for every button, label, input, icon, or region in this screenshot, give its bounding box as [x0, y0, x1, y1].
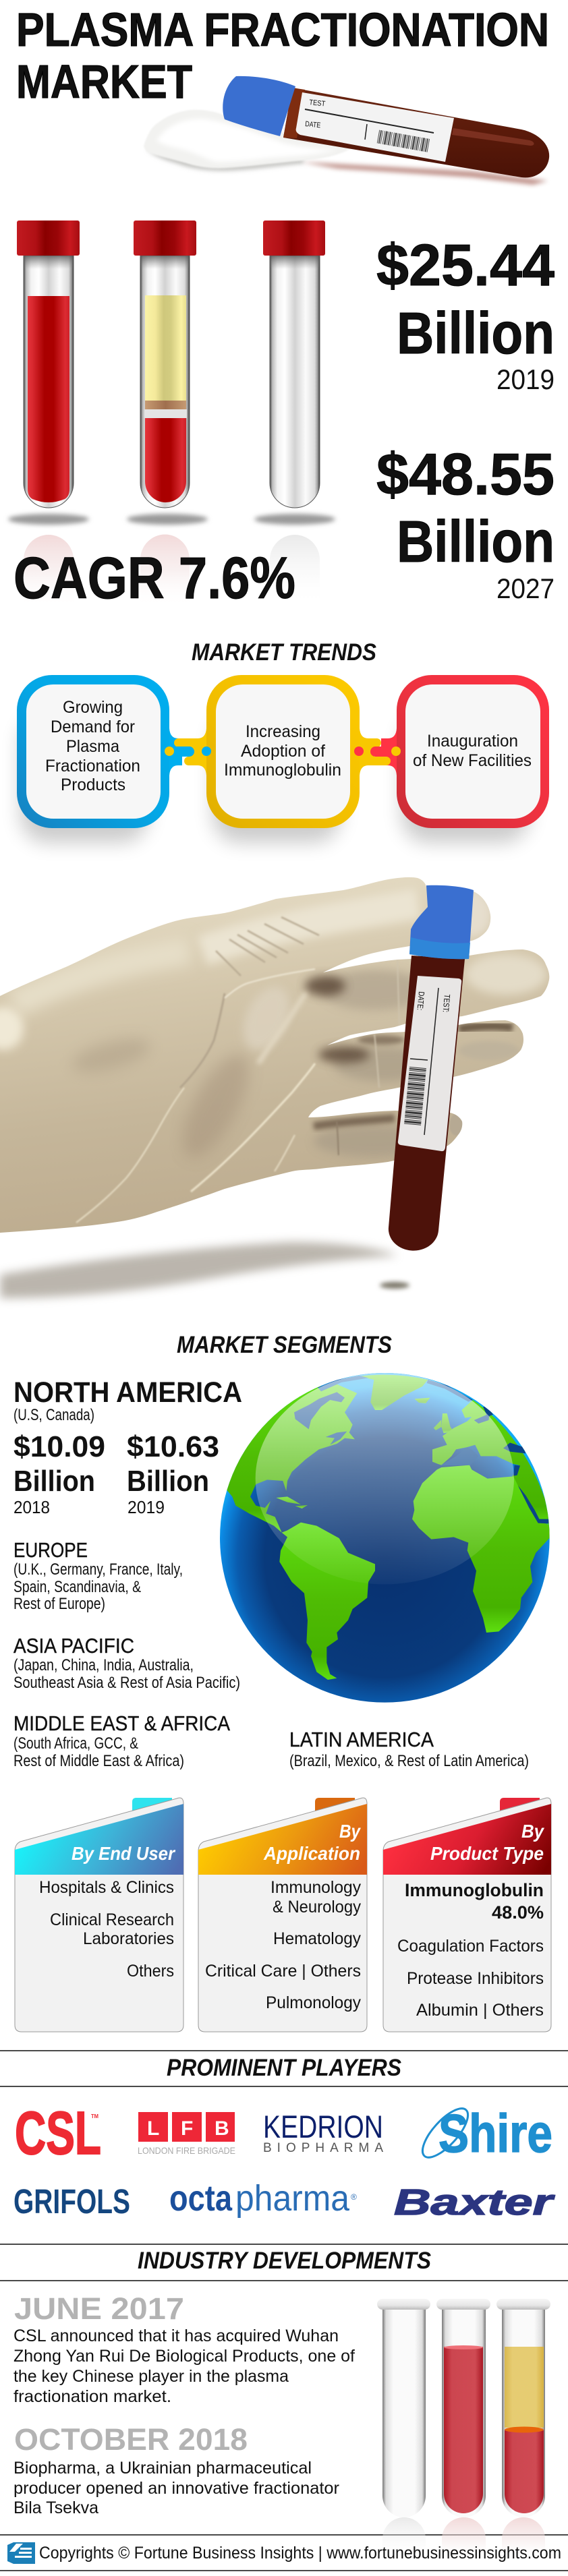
- card: increasing adoption: Immunoglobulin: [224, 761, 341, 780]
- card: increasing adoption: Adoption of: [241, 742, 325, 761]
- development text: CSL: Zhong Yan Rui De Biological Products, one of: [13, 2347, 355, 2366]
- tube shadows: [8, 514, 335, 525]
- region: europe: EUROPE: [13, 1538, 88, 1562]
- stat: 2027 market size: $48.55: [376, 442, 555, 507]
- development text: CSL: the key Chinese player in the plasma: [13, 2367, 289, 2386]
- tube body: [283, 88, 549, 177]
- image: three glass test tubes: [377, 2299, 550, 2560]
- region: middle east and africa: [13, 1711, 230, 1770]
- card: by product type: [383, 1798, 551, 2032]
- cotton ball: [144, 110, 351, 171]
- hand shadow: [0, 1242, 409, 1298]
- date: october 2018: OCTOBER 2018: [14, 2422, 248, 2457]
- logo: LFB: [138, 2112, 235, 2156]
- logo: Baxter: Baxter: [394, 2182, 555, 2223]
- logo: CSL: CSL: [15, 2100, 101, 2167]
- panel: industry developments text: [13, 2291, 355, 2517]
- stat: 2027 market size: [376, 442, 555, 604]
- development text: CSL: CSL announced that it has acquired Wuhan: [13, 2326, 339, 2345]
- title: [16, 3, 549, 108]
- card: by application: Application: [263, 1843, 360, 1864]
- glossy highlight: [256, 1373, 514, 1584]
- connector: yellow to red: [360, 728, 401, 775]
- logo: LFB: B: [215, 2117, 229, 2140]
- tube label: DATE: [305, 120, 321, 129]
- region: middle east and africa: MIDDLE EAST & AFRICA: [13, 1711, 230, 1735]
- region: north america: $10.09: [13, 1430, 105, 1463]
- card: by end user: Hospitals & Clinics: [39, 1878, 174, 1897]
- continents: [227, 1375, 550, 1680]
- region: asia pacific: ASIA PACIFIC: [13, 1634, 134, 1658]
- tube cap: [223, 76, 295, 136]
- index finger: [324, 967, 410, 1012]
- development text: Biopharma: Bila Tsekva: [13, 2498, 98, 2517]
- region: asia pacific: [13, 1634, 240, 1692]
- tube label: TEST: [309, 98, 326, 109]
- card: new facilities: [397, 675, 549, 828]
- held tube label: DATE:: [416, 991, 426, 1011]
- card: by application: By: [339, 1821, 361, 1842]
- middle finger: [334, 1045, 403, 1083]
- card: growing demand: Plasma: [66, 737, 119, 756]
- title: MARKET: [16, 55, 192, 108]
- region: north america: [13, 1376, 242, 1517]
- glove: [0, 870, 568, 1241]
- region: middle east and africa: (South Africa, GCC, &: [13, 1734, 138, 1753]
- logo: Octapharma: pharma: [235, 2178, 350, 2219]
- card: growing demand: [17, 675, 169, 828]
- tube label: [296, 92, 454, 162]
- region: north america: 2019: [127, 1497, 165, 1517]
- footer: [7, 2542, 561, 2564]
- region: north america: 2018: [13, 1497, 50, 1517]
- region: north america: Billion: [127, 1465, 209, 1498]
- card: by product type: Immunoglobulin: [405, 1880, 544, 1900]
- region: europe: Spain, Scandinavia, &: [13, 1578, 141, 1596]
- region: europe: [13, 1538, 183, 1613]
- tube reflections: [24, 535, 320, 607]
- card: by end user: Clinical Research: [50, 1910, 174, 1929]
- card: by end user: Laboratories: [83, 1929, 174, 1948]
- held tube label: TEST:: [441, 994, 452, 1013]
- connector dots: [165, 747, 401, 756]
- stat: 2019 market size: 2019: [496, 363, 555, 395]
- region: north america: Billion: [13, 1465, 95, 1498]
- logo: LFB: LONDON FIRE BRIGADE: [138, 2145, 235, 2156]
- card: increasing adoption: Increasing: [246, 722, 320, 741]
- region: north america: $10.63: [127, 1430, 219, 1463]
- card: by application: Critical Care | Others: [205, 1962, 361, 1981]
- card: by application: & Neurology: [273, 1898, 361, 1916]
- card: new facilities: of New Facilities: [413, 751, 532, 770]
- icon: globe: [220, 1373, 550, 1703]
- region: europe: (U.K., Germany, France, Italy,: [13, 1560, 183, 1579]
- logo: Kedrion Biopharma: [263, 2109, 383, 2155]
- card: by product type: Protease Inhibitors: [407, 1969, 544, 1988]
- glove creases: [76, 917, 399, 1223]
- card: by application: Hematology: [273, 1929, 361, 1948]
- card: by application: [198, 1798, 367, 2032]
- region: latin america: LATIN AMERICA: [289, 1728, 434, 1751]
- logo: Kedrion Biopharma: BIOPHARMA: [263, 2141, 383, 2155]
- reflections: [382, 2517, 545, 2560]
- tube 3: empty: [263, 221, 325, 508]
- held tube body: [389, 956, 465, 1251]
- tube 2: separated plasma: [134, 221, 196, 508]
- panel: segmentation cards: [15, 1798, 551, 2032]
- connector: blue to yellow: [165, 728, 206, 775]
- card: new facilities: Inauguration: [427, 732, 518, 751]
- held tube cap: [409, 885, 474, 959]
- card: by application: Immunology: [271, 1878, 361, 1897]
- development text: CSL: fractionation market.: [13, 2387, 171, 2406]
- region: asia pacific: Southeast Asia & Rest of Asia Pacific): [13, 1674, 240, 1692]
- heading: market trends: MARKET TRENDS: [192, 639, 376, 666]
- panel: market trends flow: [17, 675, 549, 843]
- tube 1: whole blood: [17, 221, 80, 508]
- logo: Grifols: GRIFOLS: [13, 2182, 130, 2221]
- development text: Biopharma: Biopharma, a Ukrainian pharmaceutical: [13, 2459, 312, 2478]
- development text: Biopharma: [13, 2459, 339, 2517]
- card shadows: [20, 715, 530, 843]
- region: europe: Rest of Europe): [13, 1595, 105, 1613]
- region: north america: (U.S, Canada): [13, 1406, 94, 1424]
- card: by end user: Others: [127, 1962, 174, 1981]
- card: by product type: Albumin | Others: [416, 2001, 544, 2020]
- logo: LFB: F: [181, 2117, 193, 2140]
- card: growing demand: Fractionation: [45, 757, 140, 775]
- logo: Octapharma: octa: [169, 2178, 233, 2219]
- date: june 2017: JUNE 2017: [14, 2291, 184, 2326]
- image: blood sample tube on cotton: [144, 76, 549, 185]
- panel: regional segments: [13, 1373, 550, 1770]
- region: latin america: [289, 1728, 529, 1770]
- heading: industry developments: INDUSTRY DEVELOPMENTS: [138, 2248, 431, 2274]
- stat: 2019 market size: [376, 233, 555, 395]
- card: by product type: Product Type: [430, 1843, 544, 1864]
- ring finger: [314, 1125, 397, 1159]
- logo: Octapharma: [169, 2178, 357, 2219]
- logo: Octapharma: ®: [351, 2192, 357, 2202]
- logo: CSL: TM: [91, 2113, 98, 2119]
- icon: fortune business insights logo: [7, 2542, 35, 2564]
- development text: CSL: [13, 2326, 355, 2406]
- card: growing demand: Growing: [63, 698, 123, 717]
- stat: CAGR: CAGR 7.6%: [13, 546, 295, 611]
- plasma tube: [496, 2299, 550, 2517]
- stat: 2019 market size: $25.44: [376, 233, 555, 298]
- heading: market segments: MARKET SEGMENTS: [177, 1332, 392, 1358]
- thumb and back of hand light: [202, 904, 418, 951]
- stat: 2027 market size: 2027: [496, 573, 555, 604]
- card: by product type: 48.0%: [492, 1902, 544, 1923]
- card: by end user: [15, 1798, 183, 2032]
- image: three test tubes with red caps: [8, 221, 335, 607]
- logo: LFB: L: [147, 2117, 159, 2140]
- card: increasing adoption: [206, 675, 360, 828]
- image: gloved hand holding blood tube: [0, 870, 568, 1298]
- card: by product type: By: [521, 1821, 544, 1842]
- panel: company logos: [13, 2100, 555, 2223]
- held tube label: [398, 976, 461, 1151]
- region: middle east and africa: Rest of Middle East & Africa): [13, 1752, 184, 1770]
- card: by end user: By End User: [72, 1843, 176, 1864]
- card: growing demand: Products: [61, 775, 125, 794]
- red tube: [436, 2299, 490, 2517]
- card: by product type: Coagulation Factors: [397, 1937, 544, 1956]
- development text: Biopharma: producer opened an innovative fractionator: [13, 2479, 339, 2498]
- card: growing demand: Demand for: [51, 718, 135, 736]
- seas: [294, 1376, 548, 1523]
- tube shadow: [300, 162, 548, 185]
- empty tube: [377, 2299, 430, 2517]
- heading: prominent players: PROMINENT PLAYERS: [167, 2055, 401, 2081]
- card: by application: Pulmonology: [266, 1993, 361, 2012]
- region: north america: NORTH AMERICA: [13, 1376, 242, 1409]
- region: asia pacific: (Japan, China, India, Australia,: [13, 1656, 194, 1674]
- logo: Kedrion Biopharma: KEDRION: [263, 2109, 383, 2144]
